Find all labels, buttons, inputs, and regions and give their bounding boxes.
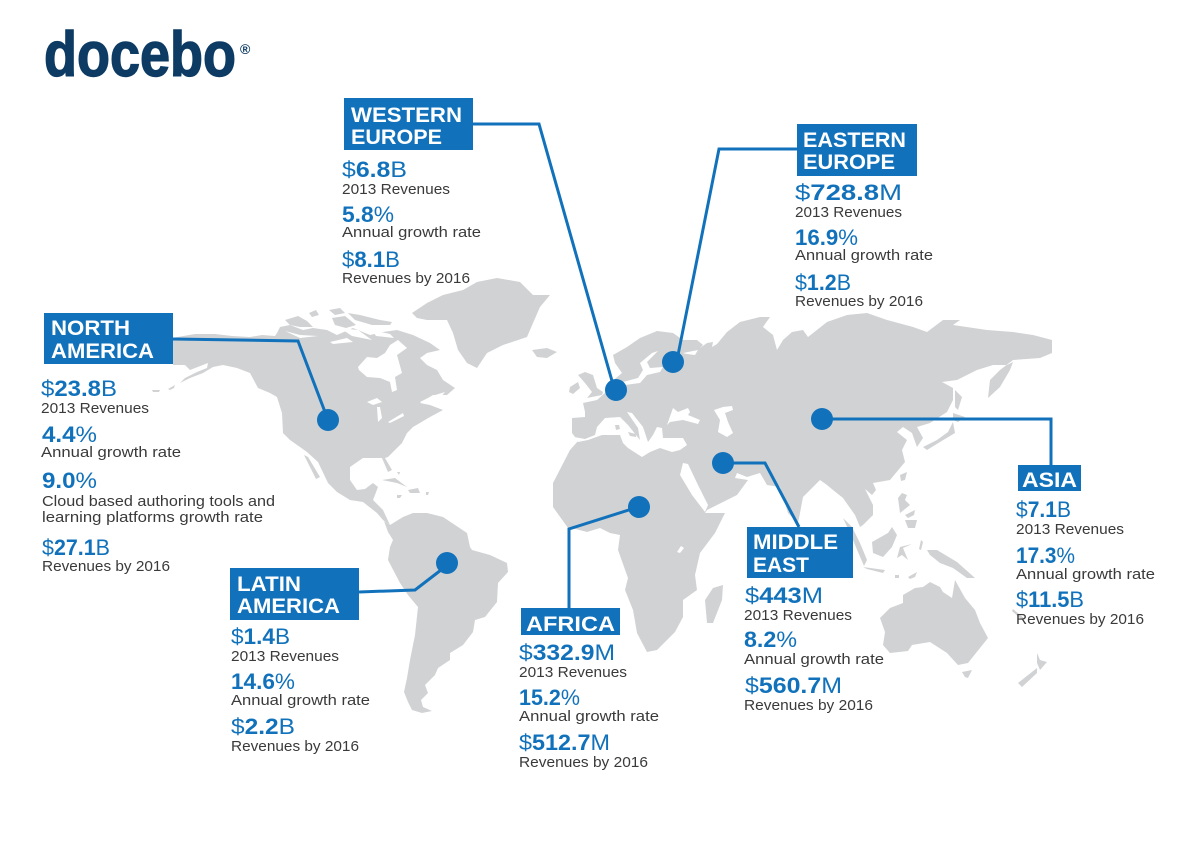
map: new zealand bbox=[1018, 653, 1047, 687]
heading: western europe bbox=[344, 98, 473, 150]
stats: north america: 9.0% bbox=[42, 468, 97, 493]
map: madagascar bbox=[705, 585, 723, 623]
panel: western europe bbox=[342, 98, 627, 401]
stats: north america: 4.4% bbox=[42, 422, 97, 447]
map: arctic channels bbox=[285, 328, 394, 344]
stats: middle east bbox=[744, 583, 884, 714]
stats: north america: $27.1B bbox=[42, 535, 110, 560]
stats: eastern europe: 2013 Revenues bbox=[795, 204, 902, 221]
stats: western europe: 2013 Revenues bbox=[342, 181, 450, 198]
stats: western europe: Annual growth rate bbox=[342, 224, 481, 241]
stats: latin america: $1.4B bbox=[231, 624, 290, 649]
stats: africa bbox=[519, 640, 659, 771]
stats: latin america: $2.2B bbox=[231, 714, 295, 739]
stats: middle east: 8.2% bbox=[744, 627, 797, 652]
map: north and central america bbox=[172, 325, 455, 525]
heading: north america: NORTH bbox=[51, 316, 130, 340]
map: red sea bbox=[680, 463, 708, 512]
map: new caledonia bbox=[1012, 609, 1025, 620]
map: caspian sea bbox=[714, 406, 733, 437]
stats: asia: $11.5B bbox=[1016, 587, 1084, 612]
world map bbox=[152, 278, 1052, 713]
panel: eastern europe bbox=[662, 124, 933, 373]
connector: middle east bbox=[733, 463, 799, 527]
map: greenland bbox=[412, 278, 550, 368]
stats: eastern europe: 16.9% bbox=[795, 225, 858, 250]
stats: asia bbox=[1016, 497, 1155, 628]
stats: africa: 15.2% bbox=[519, 685, 580, 710]
stats: north america: 2013 Revenues bbox=[41, 400, 149, 417]
heading: western europe: WESTERN bbox=[351, 103, 462, 127]
stats: africa: Revenues by 2016 bbox=[519, 754, 648, 771]
map: hudson bay bbox=[358, 340, 407, 392]
heading: north america: AMERICA bbox=[51, 339, 154, 363]
marker dot: western europe bbox=[605, 379, 627, 401]
panel: north america bbox=[41, 313, 339, 575]
heading: eastern europe: EUROPE bbox=[803, 150, 895, 174]
stats: latin america: 2013 Revenues bbox=[231, 648, 339, 665]
map: baltic sea bbox=[623, 351, 663, 385]
stats: western europe: $6.8B bbox=[342, 157, 407, 182]
stats: western europe: 5.8% bbox=[342, 202, 394, 227]
stats: western europe: Revenues by 2016 bbox=[342, 270, 470, 287]
stats: africa: Annual growth rate bbox=[519, 708, 659, 725]
map: south america bbox=[384, 513, 508, 713]
map: japan and sakhalin bbox=[923, 390, 965, 450]
marker dot: north america bbox=[317, 409, 339, 431]
map: baja california bbox=[304, 455, 320, 479]
heading: middle east bbox=[747, 527, 853, 578]
logo: docebo: docebo bbox=[44, 20, 236, 90]
stats: africa: 2013 Revenues bbox=[519, 664, 627, 681]
stats: eastern europe: Annual growth rate bbox=[795, 247, 933, 264]
map: eurasia and africa bbox=[553, 313, 1052, 652]
connector: africa bbox=[569, 509, 632, 608]
map: great lakes and st lawrence bbox=[367, 392, 445, 423]
heading: middle east: MIDDLE bbox=[753, 530, 838, 554]
stats: asia: 2013 Revenues bbox=[1016, 521, 1124, 538]
heading: latin america bbox=[230, 568, 359, 620]
marker dot: middle east bbox=[712, 452, 734, 474]
heading: latin america: AMERICA bbox=[237, 594, 340, 618]
marker dot: eastern europe bbox=[662, 351, 684, 373]
marker dot: africa bbox=[628, 496, 650, 518]
map: australia bbox=[880, 580, 988, 665]
map: lake victoria bbox=[677, 546, 684, 553]
stats: asia: $7.1B bbox=[1016, 497, 1071, 522]
heading: north america bbox=[44, 313, 173, 364]
heading: asia: ASIA bbox=[1022, 468, 1077, 492]
stats: eastern europe bbox=[795, 180, 933, 310]
panel: africa bbox=[519, 496, 659, 771]
stats: north america: $23.8B bbox=[41, 376, 117, 401]
stats: africa: $512.7M bbox=[519, 730, 610, 755]
stats: middle east: 2013 Revenues bbox=[744, 607, 852, 624]
map: uk and ireland bbox=[569, 372, 603, 398]
heading: western europe: EUROPE bbox=[351, 125, 442, 149]
stats: eastern europe: Revenues by 2016 bbox=[795, 293, 923, 310]
logo: docebo: ® bbox=[240, 41, 251, 57]
heading: africa: AFRICA bbox=[526, 612, 615, 636]
stats: eastern europe: $728.8 M bbox=[795, 180, 902, 205]
heading: eastern europe: EASTERN bbox=[803, 128, 906, 152]
panel: asia bbox=[811, 408, 1155, 628]
stats: latin america: Revenues by 2016 bbox=[231, 738, 359, 755]
map: arctic islands bbox=[285, 308, 392, 328]
stats: north america: Revenues by 2016 bbox=[42, 558, 170, 575]
stats: latin america: 14.6% bbox=[231, 669, 295, 694]
stats: asia: Annual growth rate bbox=[1016, 566, 1155, 583]
map: tasmania bbox=[962, 670, 972, 678]
stats: middle east: Annual growth rate bbox=[744, 651, 884, 668]
stats: middle east: $560.7 M bbox=[745, 673, 842, 698]
map: white sea bbox=[683, 350, 698, 355]
stats: asia: 17.3% bbox=[1016, 543, 1075, 568]
connector: western europe bbox=[473, 124, 614, 388]
panel: middle east bbox=[712, 452, 884, 714]
stats: middle east: $443 M bbox=[745, 583, 823, 608]
panel: latin america bbox=[230, 552, 458, 755]
stats: latin america bbox=[231, 624, 370, 755]
marker dot: latin america bbox=[436, 552, 458, 574]
map: caribbean islands bbox=[382, 472, 429, 498]
stats: africa: $332.9 M bbox=[519, 640, 615, 665]
stats: western europe: $8.1B bbox=[342, 247, 400, 272]
heading: eastern europe bbox=[797, 124, 917, 176]
stats: north america: learning platforms growth rate bbox=[42, 509, 263, 526]
connector: eastern europe bbox=[678, 149, 797, 355]
stats: latin america: Annual growth rate bbox=[231, 692, 370, 709]
map: aleutian islands bbox=[152, 385, 175, 392]
map: black sea bbox=[667, 408, 700, 425]
stats: asia: Revenues by 2016 bbox=[1016, 611, 1144, 628]
connector: asia bbox=[830, 419, 1051, 465]
heading: latin america: LATIN bbox=[237, 572, 301, 596]
stats: north america: Annual growth rate bbox=[41, 444, 181, 461]
map: new guinea bbox=[927, 550, 975, 578]
stats: north america bbox=[41, 376, 275, 575]
map: mediterranean islands bbox=[615, 425, 636, 437]
stats: western europe bbox=[342, 157, 481, 287]
map: southeast asia islands bbox=[843, 472, 923, 579]
marker dot: asia bbox=[811, 408, 833, 430]
stats: middle east: Revenues by 2016 bbox=[744, 697, 873, 714]
stats: north america: Cloud based authoring tools and bbox=[42, 493, 275, 510]
heading: middle east: EAST bbox=[753, 553, 809, 577]
stats: eastern europe: $1.2B bbox=[795, 270, 851, 295]
connector: latin america bbox=[359, 570, 441, 592]
map: mediterranean sea bbox=[574, 412, 687, 457]
map: iceland bbox=[532, 348, 557, 358]
connector: north america bbox=[173, 339, 325, 412]
